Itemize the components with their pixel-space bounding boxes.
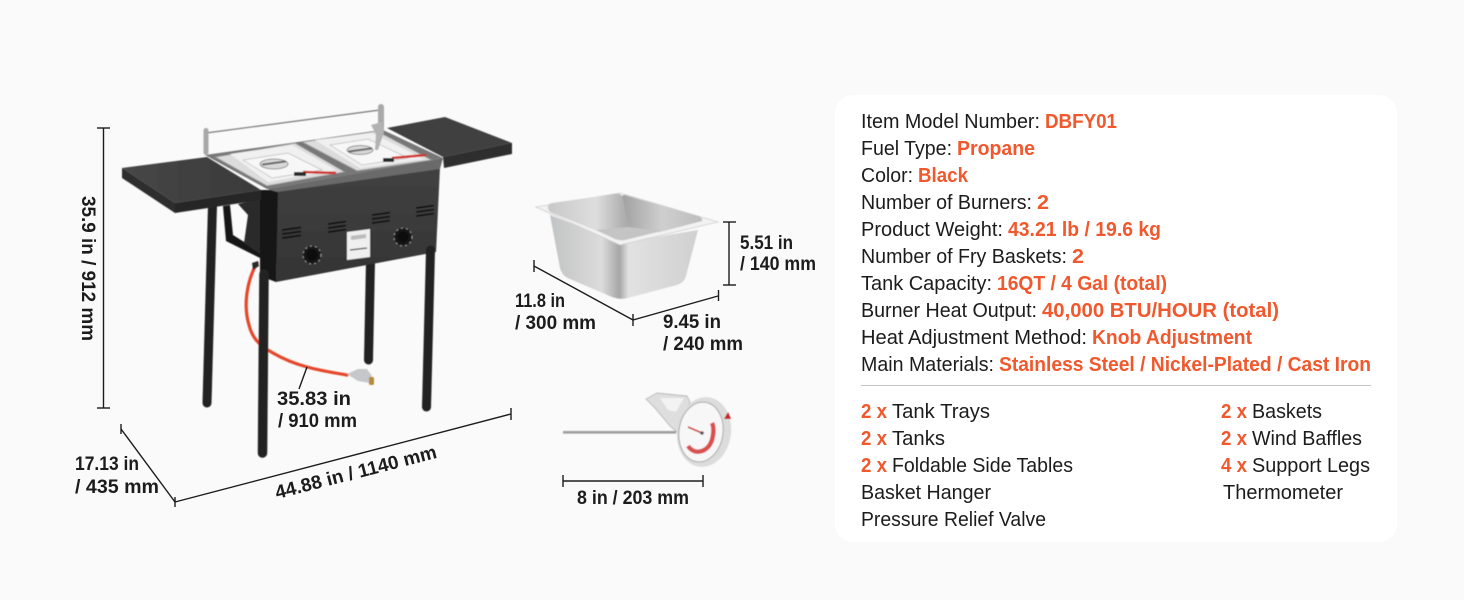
tank outer body <box>550 215 698 299</box>
probe <box>563 431 676 434</box>
front left leg <box>262 274 264 453</box>
package contents: left column: Pressure Relief Valve <box>861 508 1046 531</box>
dimension: depth <box>75 424 175 507</box>
spec: model number: Item Model Number: <box>861 110 1040 133</box>
dimension: width: 44.88 in / 1140 mm <box>273 442 439 504</box>
dimension: tank width: 9.45 in <box>663 312 721 333</box>
red basket handles <box>294 155 426 176</box>
fryer front panel <box>276 167 440 282</box>
dimension: hose length: / 910 mm <box>278 411 357 432</box>
hose clamp <box>252 261 259 270</box>
dimension: thermometer length: 8 in / 203 mm <box>577 488 689 509</box>
dimension: tank height <box>723 222 816 285</box>
fryer product illustration <box>122 104 512 453</box>
tank rim <box>536 193 718 245</box>
corner post <box>260 190 278 282</box>
left knob <box>303 246 321 264</box>
spec: burners: 2 <box>1037 191 1049 214</box>
dimension: tank height: / 140 mm <box>740 254 816 275</box>
spec: heat output: Burner Heat Output: <box>861 299 1037 322</box>
spec: weight <box>861 218 1161 241</box>
package contents: left column <box>861 400 1073 531</box>
spec: tank capacity <box>861 272 1167 295</box>
red marker <box>724 412 731 419</box>
spec: weight: Product Weight: <box>861 218 1003 241</box>
spec: color: Black <box>918 164 969 187</box>
spec: fuel type: Propane <box>957 137 1035 160</box>
package contents: right column: Wind Baffles <box>1252 427 1362 450</box>
spec: fry baskets: Number of Fry Baskets: <box>861 245 1067 268</box>
dimension: width <box>175 408 511 504</box>
package contents: right column: 4 x <box>1221 454 1248 477</box>
spec: heat output <box>861 299 1279 322</box>
basket hanger <box>204 104 384 155</box>
spec: heat adjustment <box>861 326 1252 349</box>
gas hose <box>246 263 347 375</box>
dimension: height: 35.9 in / 912 mm <box>77 196 98 341</box>
package contents: left column: 2 x <box>861 454 888 477</box>
regulator <box>347 369 374 385</box>
dimension: tank width <box>633 290 743 355</box>
spec: fuel type: Fuel Type: <box>861 137 952 160</box>
left side table <box>122 157 261 213</box>
spec: color <box>861 164 969 187</box>
package contents: left column: Basket Hanger <box>861 481 991 504</box>
spec: color: Color: <box>861 164 913 187</box>
package contents: left column: 2 x <box>861 400 888 423</box>
tank illustration <box>536 193 718 299</box>
spec: heat output: 40,000 BTU/HOUR (total) <box>1042 299 1279 322</box>
spec: materials: Main Materials: <box>861 353 994 376</box>
warning label <box>347 229 370 260</box>
dimension: tank length: 11.8 in <box>515 291 565 312</box>
panel: specifications <box>835 95 1397 542</box>
spec: materials: Stainless Steel / Nickel-Plated / Cast Iron <box>999 353 1371 376</box>
dimension: tank length: / 300 mm <box>515 313 596 334</box>
dimension: hose length: 35.83 in <box>277 389 351 410</box>
panel background <box>835 95 1397 542</box>
package contents: right column: Baskets <box>1252 400 1322 423</box>
dimension: depth: 17.13 in <box>75 454 139 475</box>
back right leg <box>368 260 370 360</box>
top plate <box>205 130 443 189</box>
spec: heat adjustment: Heat Adjustment Method: <box>861 326 1087 349</box>
dimension: tank height: 5.51 in <box>740 233 793 254</box>
tank back-right wall <box>622 195 702 232</box>
package contents: left column: Tank Trays <box>892 400 990 423</box>
package contents: right column: Support Legs <box>1252 454 1370 477</box>
right tray with lid <box>302 131 432 171</box>
tank floor <box>596 227 662 240</box>
dial <box>672 394 736 470</box>
package contents: right column: 2 x <box>1221 400 1248 423</box>
dimension: thermometer length <box>563 475 703 509</box>
right knob <box>394 228 412 246</box>
package contents: left column: Tanks <box>892 427 945 450</box>
package contents: left column: 2 x <box>861 427 888 450</box>
back left leg <box>207 205 212 403</box>
top plate front band <box>267 158 443 192</box>
side bracket <box>223 199 260 258</box>
thermometer illustration <box>563 393 736 470</box>
divider <box>861 384 1371 386</box>
dimension: tank width: / 240 mm <box>663 334 743 355</box>
vents <box>282 205 434 239</box>
package contents: right column: 2 x <box>1221 427 1248 450</box>
spec: model number: DBFY01 <box>1045 110 1117 133</box>
spec: heat adjustment: Knob Adjustment <box>1092 326 1252 349</box>
package contents: right column: Thermometer <box>1223 481 1343 504</box>
spec: fry baskets: 2 <box>1072 245 1084 268</box>
dimension: hose length <box>277 367 357 432</box>
clip <box>646 393 690 432</box>
package contents: left column: Foldable Side Tables <box>892 454 1073 477</box>
spec: materials <box>861 353 1371 376</box>
dimension: depth: / 435 mm <box>75 477 159 498</box>
left tray with lid <box>215 143 345 186</box>
spec: burners: Number of Burners: <box>861 191 1032 214</box>
spec: tank capacity: 16QT / 4 Gal (total) <box>997 272 1167 295</box>
front right leg <box>426 250 430 407</box>
package contents: right column <box>1221 400 1370 504</box>
spec: weight: 43.21 lb / 19.6 kg <box>1008 218 1161 241</box>
right side table <box>387 117 512 168</box>
spec: tank capacity: Tank Capacity: <box>861 272 992 295</box>
spec: fuel type <box>861 137 1035 160</box>
dimension: tank length <box>515 260 633 334</box>
tank back-left wall <box>548 194 628 232</box>
